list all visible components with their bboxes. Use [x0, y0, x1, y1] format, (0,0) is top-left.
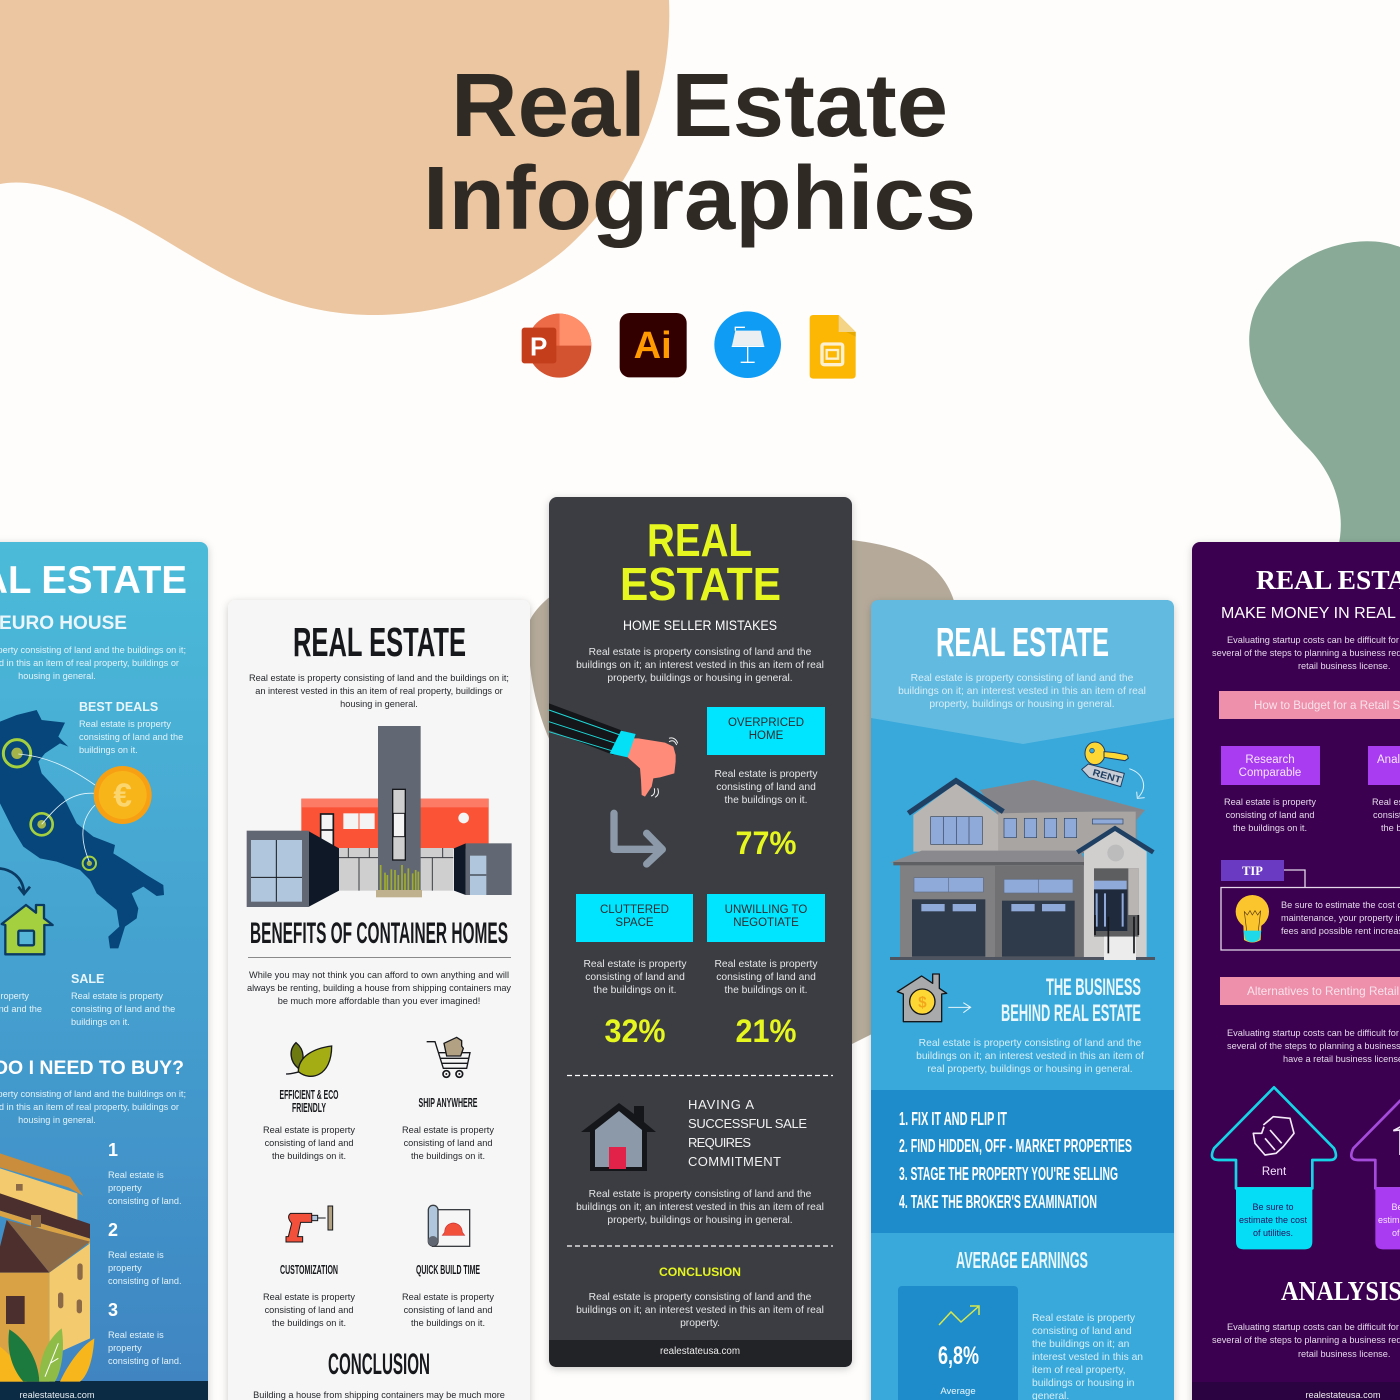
body: Real estate is property consisting of land and the	[589, 1189, 812, 1200]
numbered list: Real estate is	[108, 1250, 164, 1260]
heading: the business: BEHIND REAL ESTATE	[1001, 1000, 1141, 1027]
title: Real Estate	[451, 56, 948, 156]
conclusion	[576, 1265, 824, 1329]
icon: euro coin	[94, 766, 152, 824]
panel: home seller mistakes card	[549, 497, 852, 1367]
numbered list: 2	[108, 1220, 118, 1240]
commitment statement	[688, 1097, 807, 1169]
arrow	[0, 868, 30, 894]
earnings text	[1032, 1313, 1143, 1400]
list band: 3. STAGE THE PROPERTY YOU'RE SELLING	[899, 1163, 1118, 1184]
benefit: customization: Real estate is property	[263, 1292, 355, 1302]
panel: business behind real estate card	[871, 600, 1174, 1400]
conclusion: CONCLUSION	[659, 1265, 741, 1279]
stat: cluttered space: Real estate is property	[583, 959, 687, 970]
benefit: quick build time: consisting of land and	[404, 1305, 492, 1315]
body	[576, 1189, 824, 1226]
list band: 1. FIX IT AND FLIP IT	[899, 1108, 1007, 1129]
budget bar	[1219, 691, 1400, 719]
stat: overpriced home: the buildings on it.	[724, 795, 808, 806]
icon: light bulb	[1236, 895, 1269, 942]
benefit: ship anywhere: consisting of land and	[404, 1138, 492, 1148]
house arrow: rent: Rent	[1262, 1166, 1287, 1178]
analysis text	[1212, 1322, 1400, 1359]
conclusion: CONCLUSION	[328, 1348, 430, 1381]
icon: Illustrator	[620, 313, 687, 377]
numbered list: 3	[108, 1300, 118, 1320]
earnings text: interest vested in this an	[1032, 1352, 1143, 1363]
numbered list: consisting of land.	[108, 1276, 182, 1286]
connector curves	[18, 754, 95, 862]
stat: unwilling to negotiate: Real estate is property	[714, 959, 818, 970]
intro	[1212, 635, 1400, 671]
sale: SALE	[71, 972, 104, 986]
intro: Real estate is property consisting of land and the	[589, 647, 812, 658]
benefit: quick build time: QUICK BUILD TIME	[416, 1262, 480, 1277]
title	[423, 56, 976, 249]
house arrow: rent: estimate the cost	[1239, 1215, 1308, 1225]
research box	[1221, 746, 1320, 833]
business text: Real estate is property consisting of land and the	[919, 1038, 1142, 1049]
stat: overpriced home: OVERPRICED	[728, 717, 804, 729]
intro: property, buildings or housing in general.	[929, 699, 1115, 710]
stat: overpriced home: Real estate is property	[714, 769, 818, 780]
intro: retail business license.	[1298, 661, 1390, 671]
icon: Google Slides	[810, 315, 856, 379]
icon: key and rent tag	[1082, 742, 1145, 798]
commitment statement: SUCCESSFUL SALE	[688, 1116, 807, 1131]
benefit: efficient and eco friendly: the buildings on it.	[272, 1151, 346, 1161]
stat: cluttered space	[576, 894, 693, 1049]
intro: property, buildings or housing in general.	[607, 673, 793, 684]
numbered list: consisting of land.	[108, 1196, 182, 1206]
earnings text: the buildings on it; an	[1032, 1339, 1130, 1350]
best deals: buildings on it.	[79, 745, 138, 755]
numbered list: consisting of land.	[108, 1356, 182, 1366]
map of Italy	[0, 710, 164, 954]
intro text: housing in general.	[18, 671, 96, 681]
commitment statement: REQUIRES	[688, 1135, 751, 1150]
benefits intro: While you may not think you can afford to own anything and will	[249, 970, 509, 980]
numbered list: property	[108, 1343, 142, 1353]
footer url: realestateusa.com	[660, 1346, 740, 1357]
benefit: customization	[263, 1206, 355, 1328]
body: property, buildings or housing in general.	[607, 1215, 793, 1226]
numbered list: property	[108, 1263, 142, 1273]
illustration: container house	[247, 726, 512, 907]
alternatives bar	[1220, 977, 1400, 1005]
footer url: realestateusa.com	[19, 1390, 95, 1400]
panel: euro house card	[0, 542, 208, 1400]
icon: PowerPoint: P	[530, 331, 547, 361]
stat: cluttered space: the buildings on it.	[593, 985, 677, 996]
commitment statement: COMMITMENT	[688, 1154, 781, 1169]
list band: 2. FIND HIDDEN, OFF - MARKET PROPERTIES	[899, 1135, 1132, 1156]
house arrow: purple	[1351, 1087, 1400, 1249]
stat card: Average	[940, 1386, 976, 1397]
icon: euro coin: €	[113, 778, 132, 815]
benefit: efficient and eco friendly: consisting of land and	[265, 1138, 353, 1148]
icon: Illustrator: Ai	[634, 325, 672, 367]
benefit: customization: consisting of land and	[265, 1305, 353, 1315]
numbered list	[108, 1140, 182, 1366]
heading: average earnings: AVERAGE EARNINGS	[956, 1247, 1088, 1273]
stat: overpriced home: consisting of land and	[716, 782, 816, 793]
blob: taupe behind centre card	[529, 538, 958, 1050]
illustration: house	[890, 742, 1155, 1022]
sale: Real estate is property	[71, 991, 163, 1001]
stat: overpriced home: HOME	[749, 730, 784, 742]
stat: unwilling to negotiate: the buildings on it.	[724, 985, 808, 996]
research box: Comparable	[1239, 767, 1301, 779]
house arrow: rent: of utilities.	[1253, 1228, 1293, 1238]
intro: housing in general.	[340, 699, 418, 709]
research box: consisting of land and	[1226, 810, 1314, 820]
benefit: quick build time: Real estate is property	[402, 1292, 494, 1302]
best deals: Real estate is property	[79, 719, 171, 729]
house arrow: rent: Be sure to	[1252, 1202, 1294, 1212]
body: buildings on it; an interest vested in this an item of real	[576, 1202, 824, 1213]
map markers	[3, 740, 96, 870]
heading: ESTATE	[620, 558, 781, 610]
benefit: efficient and eco friendly: FRIENDLY	[292, 1100, 326, 1115]
illustration: thumbs down and arrow	[549, 703, 678, 864]
benefit: quick build time: the buildings on it.	[411, 1318, 485, 1328]
analyze box	[1368, 746, 1400, 833]
intro: buildings on it; an interest vested in this an item of real	[576, 660, 824, 671]
research box: Research	[1245, 754, 1295, 766]
benefit: efficient and eco friendly: Real estate is property	[263, 1125, 355, 1135]
heading: the business	[1001, 974, 1141, 1027]
analysis text: retail business license.	[1298, 1349, 1390, 1359]
stat: unwilling to negotiate: NEGOTIATE	[733, 917, 799, 929]
benefit: efficient and eco friendly: EFFICIENT & ECO	[280, 1087, 338, 1102]
research box: Real estate is property	[1224, 797, 1316, 807]
earnings text: buildings or housing in	[1032, 1378, 1135, 1389]
footer url: realestateusa.com	[1305, 1390, 1381, 1400]
benefit: customization: the buildings on it.	[272, 1318, 346, 1328]
icon: PowerPoint	[522, 314, 591, 378]
icon: dollar house	[897, 974, 971, 1022]
stat: cluttered space: CLUTTERED	[600, 904, 669, 916]
numbered list: Real estate is	[108, 1170, 164, 1180]
stat: cluttered space: consisting of land and	[585, 972, 685, 983]
benefit: ship anywhere: Real estate is property	[402, 1125, 494, 1135]
benefit: ship anywhere	[402, 1037, 494, 1161]
subheading: HOME SELLER MISTAKES	[623, 618, 777, 633]
numbered list: Real estate is	[108, 1330, 164, 1340]
intro	[898, 673, 1146, 710]
stat: unwilling to negotiate	[707, 894, 825, 1049]
commitment statement: HAVING A	[688, 1097, 754, 1112]
best deals	[79, 700, 183, 755]
business text: real property, buildings or housing in general.	[927, 1064, 1133, 1075]
numbered list: property	[108, 1183, 142, 1193]
alternatives text	[1227, 1028, 1400, 1064]
conclusion: property.	[680, 1318, 720, 1329]
heading: REAL ESTATE	[936, 619, 1109, 665]
business text: buildings on it; an interest vested in this an item of	[916, 1051, 1144, 1062]
blob: green right	[1249, 241, 1400, 548]
best deals: consisting of land and the	[79, 732, 183, 742]
conclusion: buildings on it; an interest vested in this an item of real	[576, 1305, 824, 1316]
intro: Real estate is property consisting of land and the buildings on it;	[249, 673, 509, 683]
intro: Real estate is property consisting of land and the	[911, 673, 1134, 684]
benefits intro: always be renting, building a house from shipping containers may	[247, 983, 511, 993]
research box: the buildings on it.	[1233, 823, 1307, 833]
panel: container homes card	[228, 600, 530, 1400]
heading: REAL ESTATE	[293, 619, 466, 665]
intro	[576, 647, 824, 684]
business text	[916, 1038, 1144, 1075]
benefit: efficient and eco friendly	[263, 1043, 355, 1161]
title: Infographics	[423, 149, 976, 249]
heading: REAL	[647, 514, 752, 566]
tip	[1221, 860, 1400, 950]
list band: 4. TAKE THE BROKER'S EXAMINATION	[899, 1191, 1097, 1212]
intro text	[0, 645, 186, 681]
heading	[620, 514, 781, 610]
sale: consisting of land and the	[71, 1004, 175, 1014]
icon: dollar house: $	[918, 994, 927, 1011]
sale: buildings on it.	[71, 1017, 130, 1027]
intro: an interest vested in this an item of real property, buildings or	[255, 686, 503, 696]
heading: the business: THE BUSINESS	[1046, 974, 1141, 1001]
stat: cluttered space: 32%	[604, 1013, 666, 1049]
intro: buildings on it; an interest vested in this an item of real	[898, 686, 1146, 697]
stat: unwilling to negotiate: consisting of land and	[716, 972, 816, 983]
list band	[871, 1090, 1174, 1233]
blob: tan top left	[0, 0, 669, 315]
body text	[0, 1089, 186, 1125]
panel: make money card	[1192, 542, 1400, 1400]
intro	[249, 673, 509, 709]
sale	[0, 972, 175, 1027]
benefits intro: be much more affordable than you ever imagined!	[278, 996, 480, 1006]
icon: key and rent tag: RENT	[1091, 767, 1123, 785]
stat: unwilling to negotiate: 21%	[736, 1013, 796, 1049]
best deals: BEST DEALS	[79, 700, 158, 714]
illustration: yellow building	[0, 1153, 94, 1382]
software icons	[522, 311, 856, 379]
stat: cluttered space: SPACE	[615, 917, 654, 929]
earnings text: Real estate is property	[1032, 1313, 1136, 1324]
house arrow: rent	[1212, 1087, 1336, 1249]
icon: green house	[2, 905, 53, 954]
heading: euro house: EURO HOUSE	[0, 613, 127, 634]
benefits intro	[247, 970, 511, 1006]
benefit: ship anywhere: the buildings on it.	[411, 1151, 485, 1161]
conclusion: Real estate is property consisting of land and the	[589, 1292, 812, 1303]
conclusion	[253, 1348, 505, 1400]
numbered list: 1	[108, 1140, 118, 1160]
earnings text: consisting of land and	[1032, 1326, 1132, 1337]
conclusion: Building a house from shipping containers may be much more	[253, 1390, 505, 1400]
benefit: customization: CUSTOMIZATION	[280, 1262, 338, 1277]
heading: benefits: BENEFITS OF CONTAINER HOMES	[250, 917, 508, 950]
benefit: ship anywhere: SHIP ANYWHERE	[418, 1095, 478, 1110]
icon: Keynote	[714, 311, 781, 378]
stat: unwilling to negotiate: UNWILLING TO	[725, 904, 807, 916]
stat: overpriced home: 77%	[736, 825, 796, 861]
stat card: 6,8%	[938, 1342, 979, 1370]
icon: house	[581, 1103, 656, 1171]
stat: overpriced home	[707, 707, 825, 861]
benefit: quick build time	[402, 1205, 494, 1328]
body text: housing in general.	[18, 1115, 96, 1125]
earnings text: item of real property,	[1032, 1365, 1126, 1376]
stat card	[898, 1286, 1018, 1400]
tip: TIP	[1242, 864, 1263, 878]
